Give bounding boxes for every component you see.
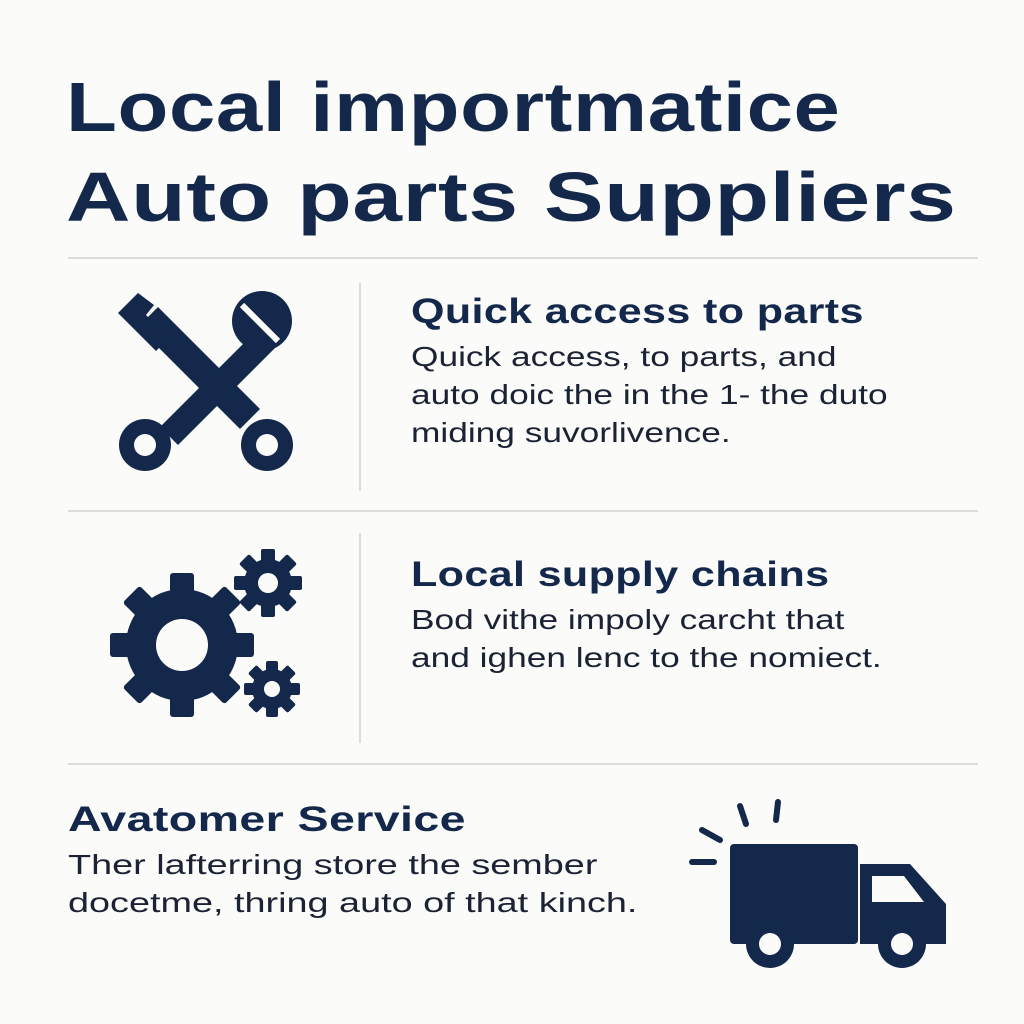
section: local supply chains: Bod vithe impoly carcht that bbox=[411, 604, 844, 635]
icon: gears bbox=[110, 549, 302, 717]
section: quick access: Quick access to parts bbox=[411, 292, 864, 331]
section: quick access: auto doic the in the 1- the duto bbox=[411, 379, 888, 410]
section: customer service bbox=[68, 800, 637, 918]
section: customer service: Ther lafterring store the sember bbox=[68, 849, 597, 880]
section: customer service: docetme, thring auto of that kinch. bbox=[68, 887, 637, 918]
section: local supply chains bbox=[411, 555, 882, 673]
section: local supply chains: and ighen lenc to the nomiect. bbox=[411, 642, 882, 673]
section: local supply chains: Local supply chains bbox=[411, 555, 829, 594]
title bbox=[66, 68, 956, 236]
icon: truck bbox=[689, 799, 946, 968]
section: quick access bbox=[411, 292, 888, 448]
section: quick access: Quick access, to parts, and bbox=[411, 341, 837, 372]
title: Auto parts Suppliers bbox=[66, 158, 956, 236]
section: quick access: miding suvorlivence. bbox=[411, 417, 731, 448]
title: Local importmatice bbox=[66, 68, 840, 146]
section: customer service: Avatomer Service bbox=[68, 800, 466, 839]
icon: wrenches bbox=[118, 291, 293, 471]
